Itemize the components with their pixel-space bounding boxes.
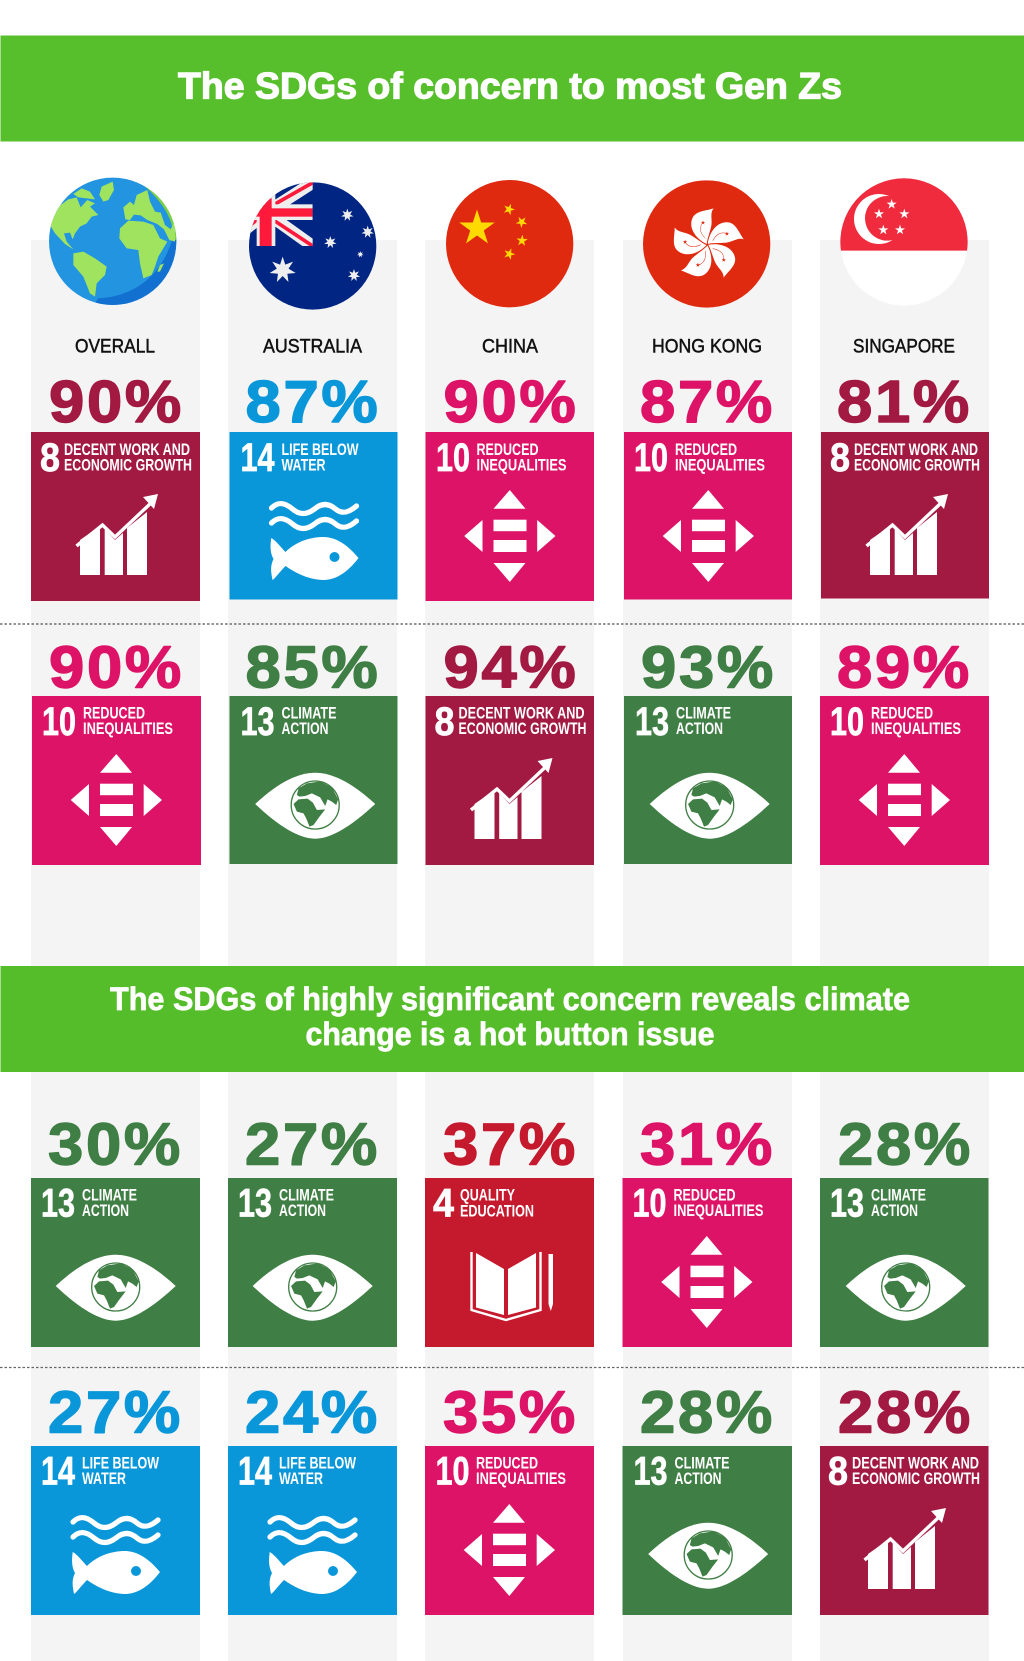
card: Australia SDG 14 (228, 1446, 397, 1615)
row 1 percentages: 87% (640, 369, 775, 435)
card: overall SDG 13: CLIMATE (82, 1186, 137, 1204)
card: Singapore SDG 13: ACTION (871, 1202, 918, 1220)
card: Singapore SDG 10: INEQUALITIES (871, 720, 961, 738)
card: overall SDG 8: ECONOMIC GROWTH (64, 456, 192, 474)
card: Singapore SDG 13 (820, 1178, 988, 1347)
country labels: OVERALL (75, 336, 155, 358)
country labels: CHINA (482, 336, 538, 358)
card: Singapore SDG 8 (820, 1446, 988, 1615)
row 4 percentages: 28% (640, 1380, 775, 1446)
card: overall SDG 10: 10 (42, 700, 76, 744)
card: Hong Kong SDG 10 (624, 432, 792, 600)
divider (0, 1366, 1024, 1368)
row 3 percentages: 27% (245, 1112, 380, 1178)
card: Singapore SDG 8 (821, 432, 989, 598)
card: Australia SDG 13: 13 (240, 700, 274, 744)
card: overall SDG 10: REDUCED (83, 704, 145, 722)
country labels: AUSTRALIA (263, 336, 362, 358)
card: China SDG 10: 10 (436, 436, 470, 480)
card: Hong Kong SDG 10: 10 (632, 1182, 666, 1226)
icon: globe (49, 178, 176, 305)
card: China SDG 10: INEQUALITIES (476, 456, 566, 474)
card: Australia SDG 13: CLIMATE (279, 1186, 334, 1204)
card: Hong Kong SDG 10 (622, 1178, 792, 1347)
row 3 percentages: 37% (443, 1112, 578, 1178)
card: Hong Kong SDG 10: INEQUALITIES (675, 456, 765, 474)
card: China SDG 10 (425, 1446, 594, 1615)
card: China SDG 10: INEQUALITIES (476, 1470, 566, 1488)
card: overall SDG 14: WATER (82, 1470, 126, 1488)
card: Singapore SDG 10: REDUCED (871, 704, 933, 722)
country labels: HONG KONG (652, 336, 762, 358)
card: Singapore SDG 10 (820, 696, 989, 865)
heading banner: highly significant concern: change is a hot button issue (306, 1016, 714, 1052)
card: Australia SDG 14: WATER (282, 456, 326, 474)
card: overall SDG 13: 13 (41, 1182, 75, 1226)
card: Hong Kong SDG 13: CLIMATE (674, 1454, 730, 1472)
card: overall SDG 14 (31, 1446, 200, 1615)
row 4 percentages: 28% (838, 1380, 973, 1446)
card: China SDG 10 (426, 432, 594, 601)
card: overall SDG 10: INEQUALITIES (83, 720, 173, 738)
heading banner: top: The SDGs of concern to most Gen Zs (178, 66, 842, 106)
card: Australia SDG 13: CLIMATE (282, 704, 336, 722)
card: Hong Kong SDG 13: 13 (635, 700, 669, 744)
card: China SDG 8: 8 (434, 700, 454, 744)
card: Australia SDG 14: LIFE BELOW (282, 441, 359, 459)
card: Hong Kong SDG 13: CLIMATE (676, 704, 731, 722)
card: overall SDG 8 (31, 432, 200, 601)
card: Singapore SDG 8: DECENT WORK AND (854, 441, 978, 459)
card: Australia SDG 14: 14 (240, 436, 275, 480)
card: Australia SDG 14: 14 (238, 1450, 273, 1494)
card: Hong Kong SDG 13: 13 (634, 1450, 668, 1494)
row 1 percentages: 90% (444, 369, 578, 435)
row 4 percentages: 24% (245, 1380, 380, 1446)
card: Singapore SDG 10: 10 (830, 700, 864, 744)
card: overall SDG 13 (31, 1178, 200, 1347)
icon: Australia flag (249, 182, 376, 310)
card: Australia SDG 14 (230, 432, 398, 600)
card: Hong Kong SDG 13 (622, 1446, 792, 1615)
card: overall SDG 8: 8 (40, 436, 60, 480)
card: China SDG 8: ECONOMIC GROWTH (458, 720, 586, 738)
card: Hong Kong SDG 10: INEQUALITIES (674, 1202, 764, 1220)
card: China SDG 4: QUALITY (460, 1186, 515, 1204)
row 1 percentages: 90% (49, 369, 184, 435)
row 2 percentages: 93% (641, 634, 776, 700)
divider (0, 623, 1024, 625)
icon: China flag (446, 180, 573, 307)
card: overall SDG 10 (32, 696, 201, 865)
heading banner: highly significant concern (0, 966, 1024, 1072)
card: Australia SDG 13: 13 (238, 1182, 272, 1226)
card: overall SDG 14: LIFE BELOW (82, 1454, 159, 1472)
row 4 percentages (48, 1380, 973, 1446)
row 2 percentages (49, 634, 972, 700)
card: Singapore SDG 13: 13 (830, 1182, 864, 1226)
card: Singapore SDG 13: CLIMATE (871, 1186, 926, 1204)
card: China SDG 4: 4 (433, 1182, 455, 1226)
card: Australia SDG 13 (228, 1178, 397, 1347)
heading banner: top (0, 36, 1024, 142)
card: China SDG 10: REDUCED (476, 441, 539, 459)
card: China SDG 4: EDUCATION (460, 1202, 534, 1220)
card: Hong Kong SDG 13: ACTION (674, 1470, 722, 1488)
card: Singapore SDG 8: DECENT WORK AND (852, 1454, 979, 1472)
card: Hong Kong SDG 10: REDUCED (674, 1186, 736, 1204)
row 3 percentages: 30% (48, 1112, 183, 1178)
card: overall SDG 8: DECENT WORK AND (64, 441, 190, 459)
card: China SDG 8 (426, 696, 594, 865)
card: overall SDG 13: ACTION (82, 1202, 129, 1220)
card: Hong Kong SDG 13 (624, 696, 792, 864)
card: China SDG 8: DECENT WORK AND (458, 704, 585, 722)
country labels: SINGAPORE (853, 336, 955, 358)
card: Australia SDG 13: ACTION (282, 720, 328, 738)
country labels (75, 336, 955, 358)
card: Hong Kong SDG 10: REDUCED (675, 441, 737, 459)
card: China SDG 10: REDUCED (476, 1454, 538, 1472)
heading banner: highly significant concern: The SDGs of highly significant concern reveals climate (110, 981, 910, 1017)
card: China SDG 4 (425, 1178, 594, 1347)
row 1 percentages: 87% (246, 369, 380, 435)
card: Singapore SDG 8: 8 (828, 1450, 848, 1494)
card: overall SDG 14: 14 (41, 1450, 76, 1494)
row 4 percentages: 27% (48, 1380, 183, 1446)
row 2 percentages: 85% (246, 634, 380, 700)
card: Singapore SDG 8: ECONOMIC GROWTH (854, 456, 980, 474)
row 2 percentages: 94% (444, 634, 578, 700)
row 3 percentages: 28% (838, 1112, 973, 1178)
row 4 percentages: 35% (443, 1380, 578, 1446)
card: China SDG 10: 10 (436, 1450, 470, 1494)
row 2 percentages: 90% (49, 634, 184, 700)
icon: Hong Kong flag (643, 180, 770, 308)
card: Australia SDG 13 (230, 696, 398, 864)
row 3 percentages: 31% (640, 1112, 775, 1178)
card: Australia SDG 14: WATER (279, 1470, 323, 1488)
card: Singapore SDG 8: ECONOMIC GROWTH (852, 1470, 980, 1488)
card: Australia SDG 14: LIFE BELOW (279, 1454, 356, 1472)
card: Hong Kong SDG 10: 10 (634, 436, 668, 480)
row 2 percentages: 89% (837, 634, 972, 700)
row 1 percentages (49, 369, 972, 435)
row 3 percentages (48, 1112, 973, 1178)
card: Hong Kong SDG 13: ACTION (676, 720, 723, 738)
card: Singapore SDG 8: 8 (830, 436, 850, 480)
icon: Singapore flag (840, 178, 968, 306)
row 1 percentages: 81% (837, 369, 972, 435)
card: Australia SDG 13: ACTION (279, 1202, 326, 1220)
